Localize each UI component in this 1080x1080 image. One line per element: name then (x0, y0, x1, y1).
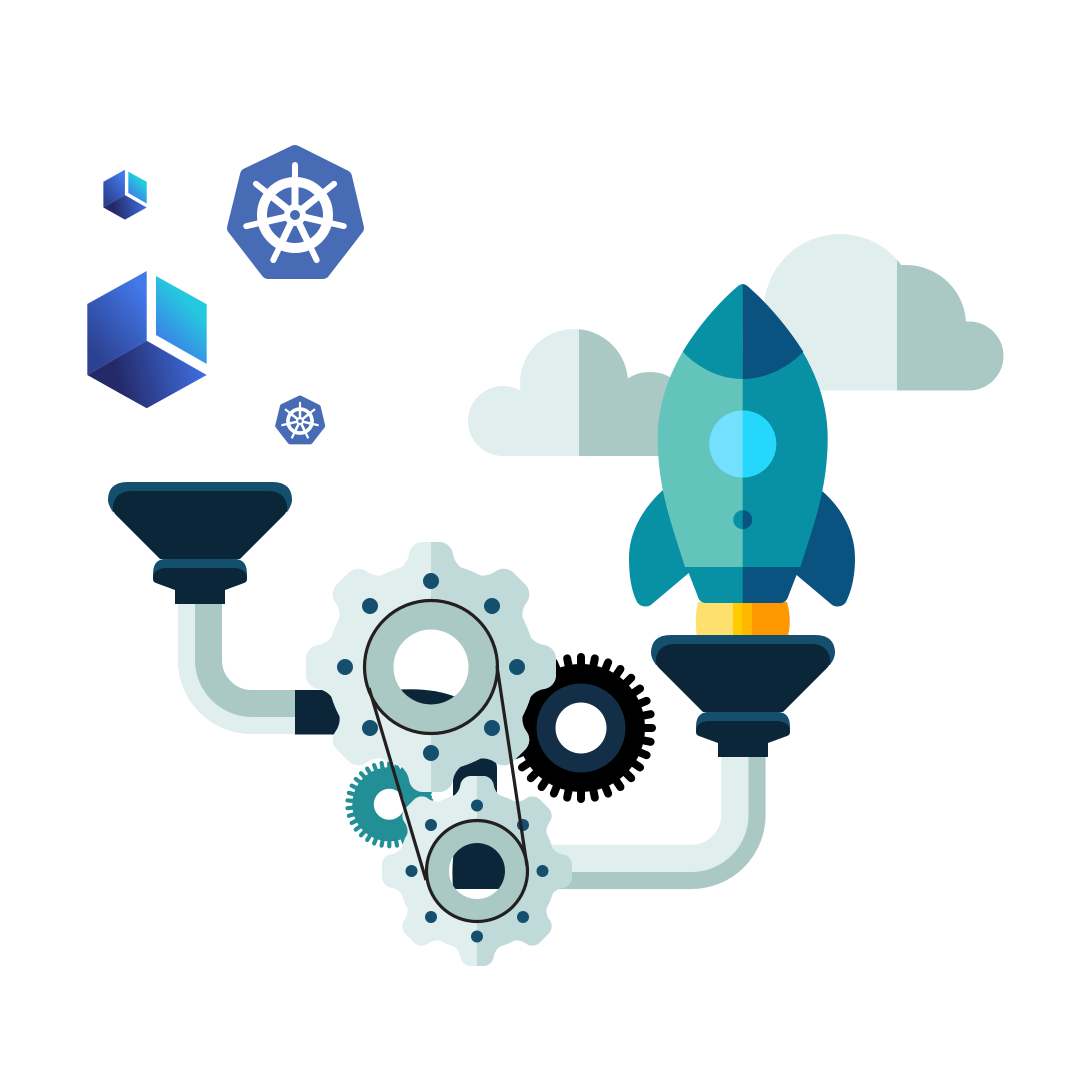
rocket (629, 284, 855, 636)
illustration: pipeline launching a rocket (87, 145, 1004, 966)
funnel: right, under rocket (651, 635, 835, 757)
logo: large cube (87, 271, 207, 408)
pulley: upper (364, 600, 498, 734)
rocket rivet (733, 510, 752, 529)
gear: black (510, 657, 652, 799)
funnel: left (108, 482, 292, 604)
gear: lower pale (382, 776, 572, 966)
gear: large pale (306, 542, 556, 792)
rocket nose (683, 284, 803, 379)
rocket body (658, 352, 828, 567)
logo: large Kubernetes helm (234, 152, 357, 272)
pipe: left, funnel to gears (186, 600, 300, 726)
pipe: right, gears to rocket funnel (550, 750, 757, 880)
fin: right (793, 490, 855, 606)
pipe connector: dark piece between gears (453, 756, 497, 796)
cloud: right (764, 234, 1004, 390)
flame (696, 602, 790, 636)
logo: small cube (103, 170, 147, 220)
cloud: left (468, 329, 670, 456)
pulley: lower (426, 820, 528, 922)
rocket window (709, 410, 776, 478)
logo: small Kubernetes helm (278, 398, 323, 442)
gear: teal small (347, 762, 432, 846)
belt (369, 666, 527, 880)
fin: left (629, 489, 690, 606)
rocket lower section (686, 566, 800, 603)
pipe connector: dark left end (295, 690, 350, 734)
